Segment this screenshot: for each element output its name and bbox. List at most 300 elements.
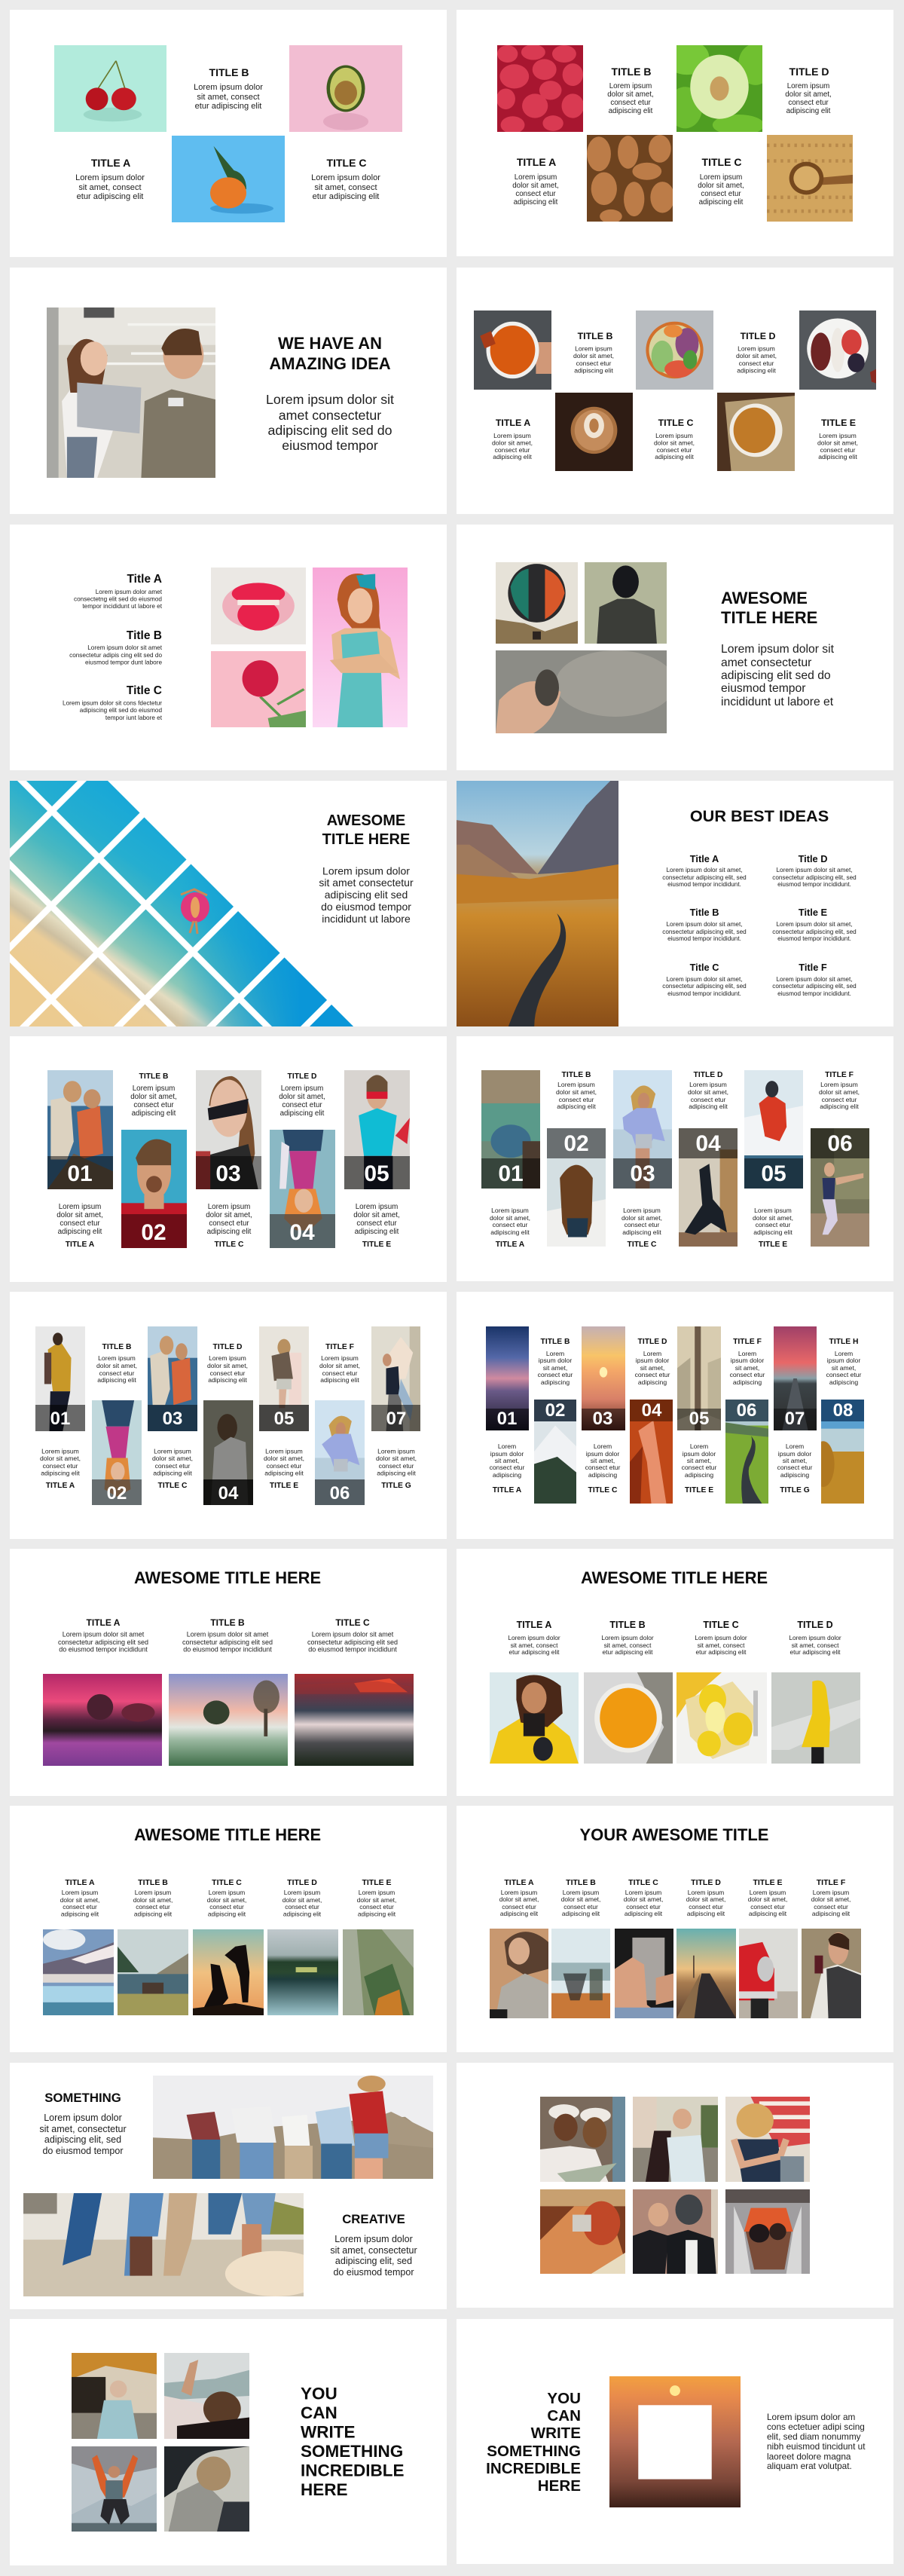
photo: avocado <box>289 45 402 132</box>
text block: title D: sit amet, <box>640 1364 664 1372</box>
text block: title D <box>282 1878 322 1917</box>
text block: title C: TITLE C <box>215 1241 244 1249</box>
card 03: 03 <box>215 1161 241 1186</box>
panel: five foods <box>457 268 893 514</box>
text block: title A: etur adipiscing elit <box>77 192 143 201</box>
text block: title E <box>772 907 857 942</box>
text block: title B <box>182 1617 273 1654</box>
text block: title B: TITLE B <box>562 1071 591 1079</box>
photo: yellow raincoat <box>771 1672 860 1764</box>
text block: title D: TITLE D <box>213 1343 242 1351</box>
text block: title B: TITLE B <box>541 1338 570 1346</box>
text block: title C <box>307 1617 398 1654</box>
text block: title D <box>279 1072 325 1118</box>
text block: title C: ipsum dolor <box>586 1450 619 1458</box>
text block: title B <box>607 66 654 115</box>
card 01 <box>481 1070 540 1189</box>
photo: glacier <box>43 1929 114 2015</box>
text block: title C: TITLE C <box>703 1620 739 1630</box>
text block: title B: consect etur <box>136 1903 170 1911</box>
text block: title D: adipiscing elit <box>208 1376 247 1384</box>
text block: title C: consectetur adipiscing elit sed <box>307 1638 398 1646</box>
text block: title B: Title B <box>127 629 162 642</box>
text block: something: Lorem ipsum dolor <box>44 2113 122 2123</box>
text block: title F: consect etur <box>814 1903 848 1911</box>
text block: title E: adipiscing elit <box>358 1910 396 1917</box>
text block: title B <box>130 1072 177 1118</box>
text block: title E: Lorem ipsum <box>819 432 857 439</box>
card 01: 01 <box>50 1409 70 1429</box>
text block: title D: adipiscing elit <box>689 1103 728 1110</box>
text block: title E: Lorem ipsum <box>356 1203 398 1211</box>
text block: title F: dolor sit amet, <box>811 1895 851 1903</box>
panel: four foods <box>457 10 893 256</box>
text block: title C: TITLE C <box>588 1486 618 1495</box>
text block: title H: adipiscing <box>829 1378 858 1386</box>
text block: title C <box>698 156 744 207</box>
text block: title E <box>357 1878 396 1917</box>
text block: title B: ipsum dolor <box>539 1357 572 1364</box>
photo: couple with laptop <box>47 307 215 478</box>
text block: title E: consect etur <box>267 1462 302 1470</box>
photo: balcony table <box>551 1929 610 2018</box>
text block: title A: adipiscing elit <box>61 1910 99 1917</box>
card 04 <box>270 1130 335 1248</box>
photo: lake cabin <box>118 1929 188 2015</box>
text block: title C: consect etur <box>657 446 692 454</box>
text block: title A: dolor sit amet, <box>512 182 559 190</box>
text block: title D: consect etur <box>285 1903 319 1911</box>
photo: hand with gravel <box>496 650 667 733</box>
text block: title B: dolor sit amet, <box>607 90 654 99</box>
text block: title B: dolor sit amet, <box>133 1896 173 1904</box>
text block: title C: dolor sit amet, <box>206 1211 252 1219</box>
heading <box>269 334 391 373</box>
text block: title D <box>686 1878 725 1917</box>
heading <box>721 589 817 627</box>
text block: title E: consect etur <box>359 1903 394 1911</box>
text block: title B: consect etur <box>99 1369 135 1377</box>
text block: title A: TITLE A <box>504 1878 534 1887</box>
text block: title B: adipiscing elit <box>609 107 653 115</box>
text block: title D: adipiscing elit <box>737 366 776 374</box>
text block: title A: Lorem ipsum dolor <box>508 1634 560 1641</box>
heading: AWESOME TITLE HERE <box>134 1568 321 1587</box>
text block: title E <box>264 1447 304 1490</box>
photo: red lips <box>211 568 306 644</box>
text block: title A: TITLE A <box>66 1241 95 1249</box>
text block: title E: consect etur <box>682 1464 717 1471</box>
text block: title A <box>499 1878 539 1917</box>
text block: title D: adipiscing <box>638 1378 667 1386</box>
text block: title C: adipiscing elit sed do eiusmod <box>80 707 162 714</box>
panel: four yellow photos <box>457 1549 893 1796</box>
text block: title D: etur adipiscing elit <box>789 1648 841 1656</box>
panel: diagonal lattice <box>0 754 578 1075</box>
text block: title D: sit amet, consect <box>792 1641 839 1649</box>
text block: title D: consectetur adipiscing elit, sed <box>772 874 857 881</box>
card 05: 05 <box>761 1161 786 1186</box>
text block: title G <box>777 1442 813 1495</box>
card 03 <box>196 1070 261 1189</box>
text block: title A: consect etur <box>60 1219 100 1228</box>
text block: title D: Lorem ipsum <box>281 1085 323 1093</box>
photo: couple in street <box>633 2097 718 2182</box>
text block: title C: tempor iunt labore et <box>105 714 163 721</box>
text block: title A: TITLE A <box>493 1486 522 1495</box>
text block: title B: consect etur <box>610 99 651 107</box>
text block: title E <box>753 1207 793 1249</box>
text block: title E: consectetur adipiscing elit, sed <box>772 929 857 935</box>
photo: man with wine <box>802 1929 861 2018</box>
photo: child hug <box>725 2097 810 2182</box>
text block: title D: dolor sit amet, <box>279 1093 325 1101</box>
panel: six tall photos <box>457 1806 893 2052</box>
text block: title E: consect etur <box>820 446 856 454</box>
panel: pink portraits <box>10 525 447 770</box>
heading: WRITE <box>531 2425 581 2442</box>
text block: title A <box>60 1878 99 1917</box>
text block: title F <box>772 962 857 997</box>
photo: woman with red hair <box>313 568 408 727</box>
text block: title B: adipiscing elit <box>557 1103 596 1110</box>
heading: SOMETHING <box>301 2442 403 2461</box>
text block: title A: adipiscing elit <box>58 1228 102 1236</box>
text block: title C <box>654 418 695 460</box>
card 04 <box>203 1400 253 1505</box>
text block: title C: Lorem ipsum <box>655 432 693 439</box>
text block: title B: eiusmod tempor incididunt. <box>667 935 741 942</box>
text block: title B <box>69 629 163 666</box>
text block: title G: TITLE G <box>780 1486 810 1495</box>
text block: title E <box>748 1878 787 1917</box>
heading: CAN <box>547 2407 581 2425</box>
text block: title B: TITLE B <box>566 1878 596 1887</box>
text block: title B: adipiscing elit <box>97 1376 136 1384</box>
text block: title A: Title A <box>127 573 162 586</box>
text block: title A: adipiscing elit <box>500 1910 539 1917</box>
text block: title B <box>96 1343 137 1384</box>
text block: title D <box>772 853 857 888</box>
card 03 <box>613 1070 672 1189</box>
text block: title A <box>492 418 533 460</box>
text block: title B: adipiscing elit <box>574 366 613 374</box>
text block: title E: dolor sit amet, <box>748 1895 787 1903</box>
text block: title C: Lorem ipsum dolor sit amet, <box>666 976 743 983</box>
text block: title E: Lorem ipsum <box>359 1889 395 1896</box>
text block: Lorem ipsum dolor sit <box>721 643 835 656</box>
photo: person from behind <box>585 562 667 644</box>
panel: something creative <box>10 2063 447 2309</box>
text block: title A: TITLE A <box>496 418 530 428</box>
text block: title G: ipsum dolor <box>778 1450 811 1458</box>
photo: red sky mountains <box>295 1674 414 1766</box>
text block: title A: Lorem ipsum <box>501 1889 537 1896</box>
card 02 <box>121 1130 187 1248</box>
text block: title A: dolor sit amet, <box>499 1895 539 1903</box>
text block: title D: dolor sit amet, <box>282 1896 322 1904</box>
text block: title D: TITLE D <box>691 1878 721 1887</box>
text block: title D: consect etur <box>282 1101 322 1109</box>
panel: three landscapes <box>10 1549 447 1796</box>
text block: something: SOMETHING <box>44 2091 121 2105</box>
photo: hair out of car window <box>164 2446 249 2532</box>
text block: title A: Lorem ipsum <box>493 432 531 439</box>
text block: title A <box>40 1447 81 1490</box>
text block: title A: dolor sit amet, <box>40 1455 81 1462</box>
card 03: 03 <box>630 1161 655 1186</box>
text block: title G: consect etur <box>379 1462 414 1470</box>
text block: title C: TITLE C <box>702 156 741 168</box>
photo: two women in hats <box>540 2097 625 2182</box>
text block: title B: Lorem ipsum dolor sit amet, <box>666 921 743 928</box>
text block: title C: consect etur <box>585 1464 621 1471</box>
card 02 <box>534 1400 576 1504</box>
text block: title E: TITLE E <box>821 418 856 428</box>
text block: title A <box>512 156 559 207</box>
card 03 <box>148 1326 197 1431</box>
text block: title C: consectetur adipiscing elit, sed <box>662 983 747 990</box>
text block: title A <box>508 1620 560 1656</box>
text block: title C: Lorem ipsum <box>209 1889 245 1896</box>
card 02: 02 <box>545 1400 565 1421</box>
text block: title C <box>63 684 163 721</box>
card 03: 03 <box>593 1409 612 1429</box>
text block: title F: Lorem ipsum dolor sit amet, <box>776 976 853 983</box>
text block: title C: etur adipiscing elit <box>313 192 379 201</box>
text block: title C: Lorem ipsum <box>700 173 742 182</box>
text block: title E: consect etur <box>356 1219 397 1228</box>
photo: woman in yellow coat <box>490 1672 579 1764</box>
text block: title A: consect etur <box>63 1903 97 1911</box>
text block: title E: Lorem ipsum <box>754 1207 792 1214</box>
text block: title E: TITLE E <box>753 1878 783 1887</box>
text block: title B: adipiscing elit <box>132 1109 176 1118</box>
text block: title A: consect etur <box>495 446 530 454</box>
text block: title C: TITLE C <box>158 1482 188 1490</box>
text block: title A: TITLE A <box>91 157 130 169</box>
text block: creative: adipiscing elit, sed <box>335 2256 412 2266</box>
panel: six couples <box>457 2063 893 2308</box>
text block: nibh euismod tincidunt ut <box>767 2441 866 2452</box>
text block: title E: TITLE E <box>362 1241 391 1249</box>
card 01: 01 <box>498 1161 524 1186</box>
text block: title B: consect etur <box>563 1903 598 1911</box>
heading <box>301 2385 405 2499</box>
text block: title H: Lorem <box>835 1350 853 1357</box>
text block: creative: CREATIVE <box>342 2212 405 2226</box>
heading <box>486 2390 581 2495</box>
photo: magenta lake <box>43 1674 162 1766</box>
text block: title D <box>207 1343 248 1384</box>
text block: title E: adipiscing elit <box>749 1910 787 1917</box>
text block: title B <box>573 331 614 374</box>
text block: title B: Lorem ipsum dolor sit amet <box>87 644 163 651</box>
text block: title D: dolor sit amet, <box>207 1362 248 1369</box>
text block: title D: TITLE D <box>287 1878 317 1887</box>
panel: awesome title with three photos <box>457 525 893 770</box>
panel: six numbered photos <box>457 1036 893 1281</box>
text block: title E: Lorem ipsum dolor sit amet, <box>776 921 853 928</box>
card 06 <box>725 1400 768 1504</box>
text block: title F: adipiscing <box>733 1378 762 1386</box>
text block: title B: adipiscing elit <box>134 1910 173 1917</box>
text block: title A: Lorem ipsum dolor sit amet <box>63 1631 145 1638</box>
text block: title E: TITLE E <box>270 1482 298 1490</box>
text block: title E: adipiscing elit <box>818 453 857 460</box>
card 02 <box>547 1128 606 1247</box>
text block: title C: Title C <box>690 962 719 973</box>
text block: title A: dolor sit amet, <box>60 1896 99 1904</box>
text block: title C: TITLE C <box>628 1878 658 1887</box>
text block: title C: adipiscing elit <box>207 1228 252 1236</box>
text block: title A: consect etur <box>43 1462 78 1470</box>
text block: title F: sit amet, <box>735 1364 759 1372</box>
text block: title B <box>133 1878 173 1917</box>
text block: title C: consect etur <box>626 1903 661 1911</box>
text block: do eiusmod tempor <box>321 901 411 913</box>
text block <box>266 392 394 453</box>
text block: title C: Lorem <box>594 1442 612 1450</box>
heading: AWESOME <box>721 589 808 607</box>
text block: title A <box>490 1207 530 1249</box>
panel: seven numbered portraits <box>10 1292 447 1539</box>
text block: title F: dolor sit amet, <box>819 1088 860 1096</box>
text block: title B: adipiscing <box>541 1378 570 1386</box>
text block: title E <box>817 418 858 460</box>
text block: title A: Lorem ipsum <box>41 1447 79 1455</box>
text block: title F: adipiscing elit <box>820 1103 859 1110</box>
text block: title E: TITLE E <box>759 1241 787 1249</box>
text block: title A: adipiscing elit <box>41 1470 80 1477</box>
text block: title C <box>152 1447 193 1490</box>
text block: title C: adipiscing elit <box>208 1910 246 1917</box>
text block: title B: consect etur <box>559 1096 594 1103</box>
text block: title B: TITLE B <box>578 331 612 341</box>
text block: title B: dolor sit amet, <box>130 1093 177 1101</box>
text block: title F: consectetur adipiscing elit, sed <box>772 983 857 990</box>
card 01 <box>35 1326 85 1431</box>
text block: title C: do eiusmod tempor incididunt <box>308 1646 397 1654</box>
text block: title F <box>730 1338 765 1386</box>
heading: OUR BEST IDEAS <box>690 806 829 825</box>
text block: title D: consect etur <box>635 1371 670 1378</box>
text block: title C: TITLE C <box>335 1617 370 1628</box>
card 04 <box>630 1400 673 1504</box>
text block: title C: consect etur <box>155 1462 191 1470</box>
text block: title D: Lorem ipsum dolor sit amet, <box>776 867 853 873</box>
text block: title D <box>785 66 832 115</box>
photo: acai bowl <box>799 311 876 390</box>
text block: title C <box>585 1442 621 1495</box>
text block: title D: adipiscing elit <box>687 1910 725 1917</box>
text block: sit amet consectetur <box>319 877 414 889</box>
text block: title E: dolor sit amet, <box>753 1214 793 1222</box>
text block: title F: consect etur <box>322 1369 358 1377</box>
card 06 <box>315 1400 365 1505</box>
card 07: 07 <box>386 1409 406 1429</box>
card 06: 06 <box>827 1131 853 1156</box>
text block: title B: Lorem ipsum <box>609 82 652 90</box>
text block: title E: adipiscing elit <box>264 1470 304 1477</box>
text block: title C: consect etur <box>701 190 741 198</box>
text block: title C: adipiscing elit <box>625 1910 663 1917</box>
text block: title A: Lorem ipsum dolor sit amet, <box>666 867 743 873</box>
text block: title B: Lorem <box>546 1350 564 1357</box>
text block: title B <box>538 1338 573 1386</box>
photo: misty trees <box>169 1674 288 1766</box>
text block: title F: adipiscing elit <box>320 1376 359 1384</box>
text block: title B: dolor sit amet, <box>96 1362 137 1369</box>
text block: title F: Lorem <box>738 1350 756 1357</box>
text block: title A <box>490 1442 525 1495</box>
text block: adipiscing elit sed do <box>721 669 831 682</box>
text block <box>767 2412 866 2471</box>
text block: title G <box>376 1447 417 1490</box>
text block: title C: dolor sit amet, <box>624 1895 663 1903</box>
text block: title A: TITLE A <box>496 1241 525 1249</box>
photo: cherries <box>54 45 166 132</box>
heading: TITLE HERE <box>721 608 817 627</box>
text block: title E: eiusmod tempor incididunt. <box>777 935 851 942</box>
text block: title C: Lorem ipsum <box>623 1207 661 1214</box>
text block: title C: adipiscing <box>588 1471 617 1479</box>
photo: lemons <box>676 1672 767 1764</box>
text block: title F <box>319 1343 360 1384</box>
heading: CAN <box>301 2403 337 2422</box>
text block: title D: TITLE D <box>694 1071 722 1079</box>
card 06 <box>811 1128 869 1247</box>
card 08: 08 <box>833 1400 853 1421</box>
text block: title E: Lorem ipsum <box>750 1889 786 1896</box>
text block: title F: TITLE F <box>825 1071 854 1079</box>
text block: title B: Lorem ipsum <box>575 345 612 353</box>
text block: title C <box>624 1878 663 1917</box>
text block: title C: TITLE C <box>658 418 693 428</box>
text block: adipiscing elit sed <box>325 889 408 901</box>
text block: title H: sit amet, <box>832 1364 856 1372</box>
text block: title A: consectetur adipiscing elit, sed <box>662 874 747 881</box>
text block: title B: do eiusmod tempor incididunt <box>183 1646 272 1654</box>
text block: title A: Lorem <box>498 1442 516 1450</box>
text block: title A: consect etur <box>502 1903 536 1911</box>
text block: title B <box>194 66 263 111</box>
text block: title D: dolor sit amet, <box>688 1088 728 1096</box>
photo: raspberries <box>497 45 583 132</box>
card 02: 02 <box>141 1220 166 1245</box>
card 03 <box>582 1326 625 1430</box>
panel: three fruits <box>10 10 447 257</box>
panel: amazing idea <box>10 268 447 514</box>
text block: title A: TITLE A <box>46 1482 75 1490</box>
text block: title C: adipiscing elit <box>655 453 694 460</box>
photo: kissing in car <box>725 2189 810 2274</box>
heading: YOUR AWESOME TITLE <box>580 1825 768 1844</box>
text block: title B: TITLE B <box>609 1620 646 1630</box>
heading: HERE <box>301 2480 348 2499</box>
text block: title B: dolor sit amet, <box>561 1895 600 1903</box>
card 05 <box>677 1326 721 1430</box>
text block: something: sit amet, consectetur <box>39 2124 127 2134</box>
panel: five landscapes <box>10 1806 447 2052</box>
text block: amet consectetur <box>721 656 811 669</box>
text block: title B: Lorem ipsum <box>557 1081 595 1088</box>
panel: five numbered portraits <box>10 1036 447 1282</box>
card 02 <box>92 1400 142 1505</box>
text block: creative: do eiusmod tempor <box>333 2267 414 2278</box>
text block: title E: adipiscing elit <box>753 1228 793 1236</box>
photo: girl with camera <box>540 2189 625 2274</box>
